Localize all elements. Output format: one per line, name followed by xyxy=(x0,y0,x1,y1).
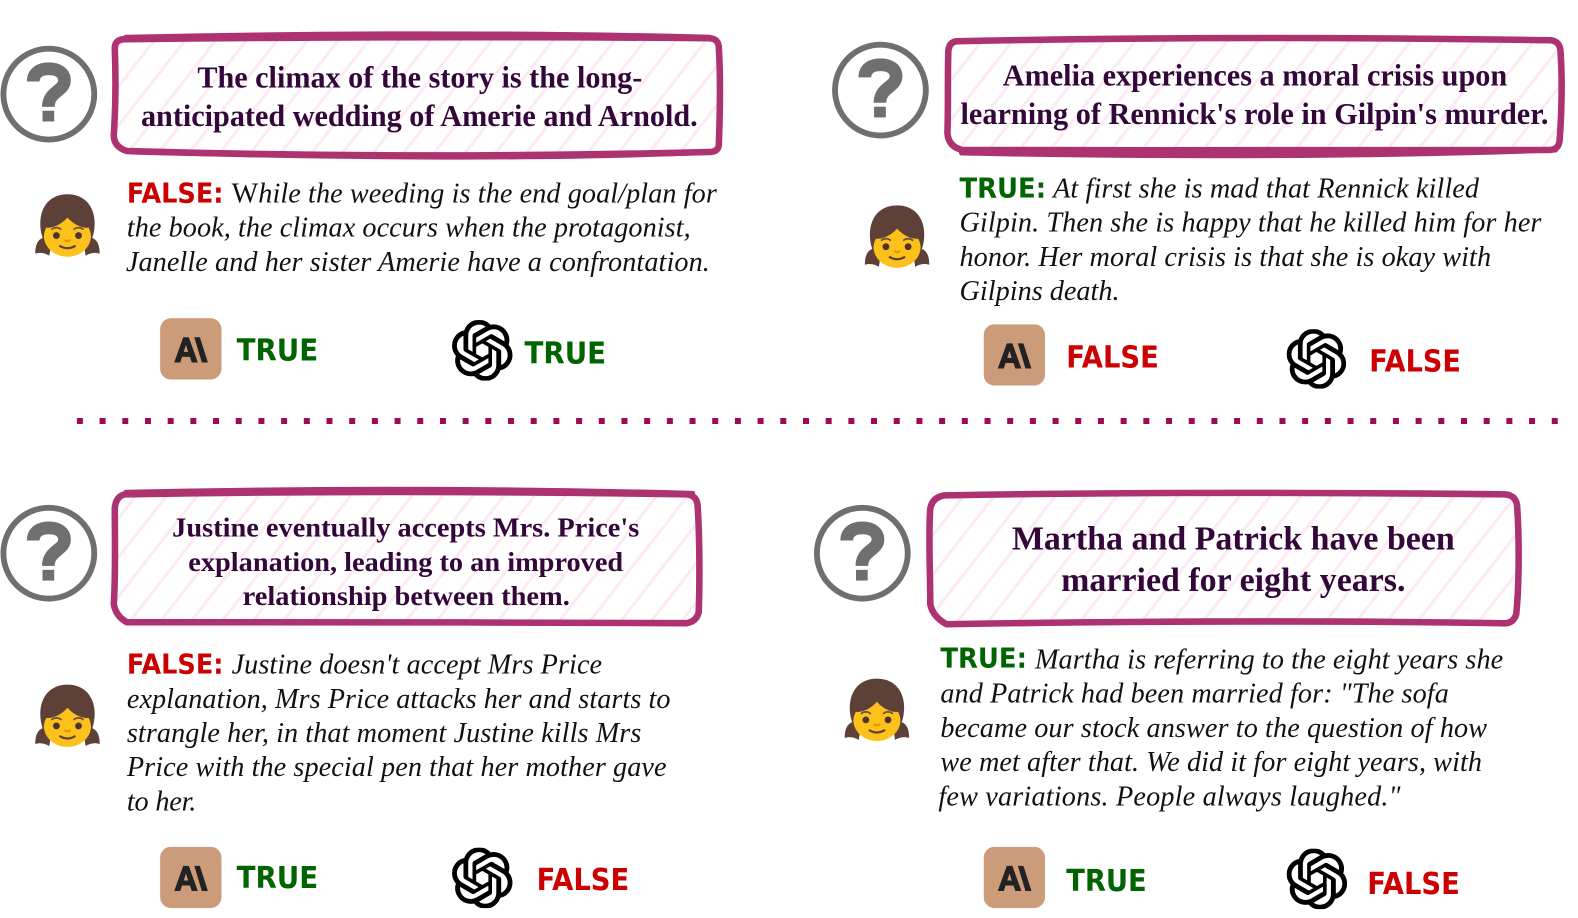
annotator explanation: few variations. People always laughed." xyxy=(938,781,1401,812)
model verdicts: TRUE xyxy=(525,336,606,371)
annotator explanation: Justine doesn't accept Mrs Price xyxy=(232,650,602,681)
annotator explanation: we met after that. We did it for eight years, with xyxy=(940,747,1482,778)
annotator explanation: FALSE: xyxy=(127,178,224,209)
model verdicts: FALSE xyxy=(1066,340,1159,375)
claim box: relationship between them. xyxy=(243,580,570,611)
annotator explanation: FALSE: xyxy=(127,650,224,681)
model verdicts xyxy=(984,324,1461,389)
annotator explanation: TRUE: xyxy=(959,173,1046,204)
icon: question mark xyxy=(817,508,908,599)
annotator explanation: strangle her, in that moment Justine kills Mrs xyxy=(127,718,641,749)
model verdicts xyxy=(160,318,606,381)
claim box: Martha and Patrick have been xyxy=(1012,521,1455,558)
claim box: married for eight years. xyxy=(1061,562,1405,599)
icon: question mark xyxy=(835,45,926,136)
model verdicts xyxy=(984,847,1460,909)
claim box xyxy=(114,34,720,157)
annotator explanation: Gilpin. Then she is happy that he killed him for her xyxy=(959,208,1542,239)
annotator explanation: became our stock answer to the question of how xyxy=(940,713,1487,744)
annotator explanation xyxy=(126,650,671,817)
annotator explanation: Price with the special pen that her mother gave xyxy=(126,752,667,783)
model verdicts: TRUE xyxy=(1066,864,1147,899)
annotator explanation: honor. Her moral crisis is that she is okay with xyxy=(959,242,1491,273)
icon: question mark xyxy=(3,508,94,599)
icon: girl annotator xyxy=(35,194,100,257)
annotator explanation: explanation, Mrs Price attacks her and starts to xyxy=(127,684,671,715)
annotator explanation xyxy=(959,173,1542,307)
dotted divider xyxy=(77,418,1558,424)
model verdicts: TRUE xyxy=(237,861,318,896)
claim box: anticipated wedding of Amerie and Arnold. xyxy=(141,99,698,133)
annotator explanation: TRUE: xyxy=(940,644,1027,675)
claim box: Amelia experiences a moral crisis upon xyxy=(1003,59,1507,93)
annotator explanation: Martha is referring to the eight years she xyxy=(1034,645,1503,676)
claim box: The climax of the story is the long- xyxy=(197,61,642,95)
model verdicts: FALSE xyxy=(1367,867,1460,902)
claim box xyxy=(947,38,1562,156)
model verdicts: TRUE xyxy=(237,333,318,368)
icon: girl annotator xyxy=(35,685,100,747)
model verdicts xyxy=(160,847,629,908)
claim box: learning of Rennick's role in Gilpin's murder. xyxy=(960,97,1548,131)
icon: question mark xyxy=(3,49,94,140)
panel: Justine and Mrs Price claim xyxy=(3,489,699,908)
annotator explanation: While the weeding is the end goal/plan for xyxy=(232,178,718,209)
claim box xyxy=(114,489,699,623)
panel: Amelia moral crisis claim xyxy=(835,38,1562,389)
annotator explanation: Gilpins death. xyxy=(959,276,1120,307)
annotator explanation: and Patrick had been married for: "The sofa xyxy=(940,679,1449,710)
model verdicts: FALSE xyxy=(537,863,629,898)
icon: girl annotator xyxy=(865,205,929,268)
claim box: Justine eventually accepts Mrs. Price's xyxy=(172,512,640,543)
annotator explanation: Janelle and her sister Amerie have a confrontation. xyxy=(126,247,710,278)
annotator explanation: the book, the climax occurs when the protagonist, xyxy=(127,213,691,244)
claim box xyxy=(929,493,1519,624)
panel: Amerie and Arnold wedding claim xyxy=(3,34,720,381)
claim box: explanation, leading to an improved xyxy=(188,546,624,577)
icon: girl annotator xyxy=(845,679,909,741)
annotator explanation xyxy=(126,178,718,278)
panel: Martha and Patrick claim xyxy=(817,493,1519,909)
annotator explanation xyxy=(938,644,1503,812)
annotator explanation: At first she is mad that Rennick killed xyxy=(1051,173,1480,204)
annotator explanation: to her. xyxy=(127,786,196,817)
model verdicts: FALSE xyxy=(1369,345,1461,380)
